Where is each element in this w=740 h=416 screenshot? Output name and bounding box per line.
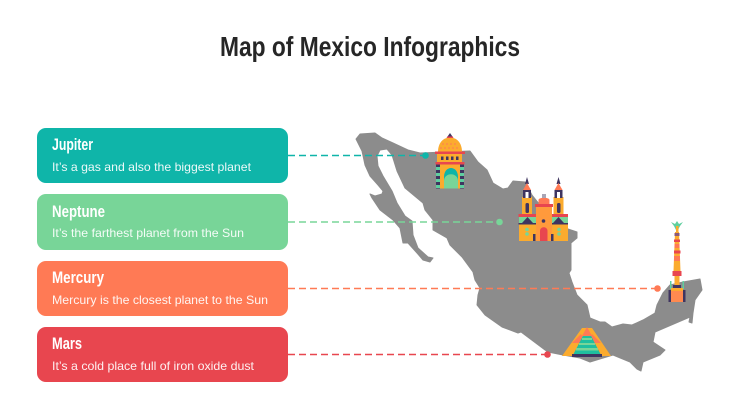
icon: independence column [668, 221, 686, 302]
text: Mars description: It’s a cold place full of iron oxide dust [52, 359, 255, 373]
connector: Jupiter [288, 152, 429, 159]
title: Map of Mexico Infographics [220, 31, 520, 62]
heading: Jupiter: Jupiter [52, 135, 93, 154]
connector: Mercury [288, 285, 661, 292]
icon: domed building [435, 133, 465, 188]
panel: Mars [37, 327, 288, 382]
panel: Mercury [37, 261, 288, 316]
heading: Mars: Mars [52, 334, 82, 353]
panel: Jupiter [37, 128, 288, 183]
text: Mercury description: Mercury is the closest planet to the Sun [52, 293, 268, 307]
text: Jupiter description: It’s a gas and also the biggest planet [52, 160, 252, 174]
icon: cathedral [518, 177, 568, 241]
heading: Mercury: Mercury [52, 268, 104, 287]
text: Neptune description: It’s the farthest planet from the Sun [52, 226, 244, 240]
map of Mexico [356, 133, 702, 371]
panel: Neptune [37, 194, 288, 250]
connector: Mars [288, 351, 551, 358]
icon: pyramid [562, 327, 611, 357]
connector: Neptune [288, 219, 503, 225]
heading: Neptune: Neptune [52, 202, 105, 221]
